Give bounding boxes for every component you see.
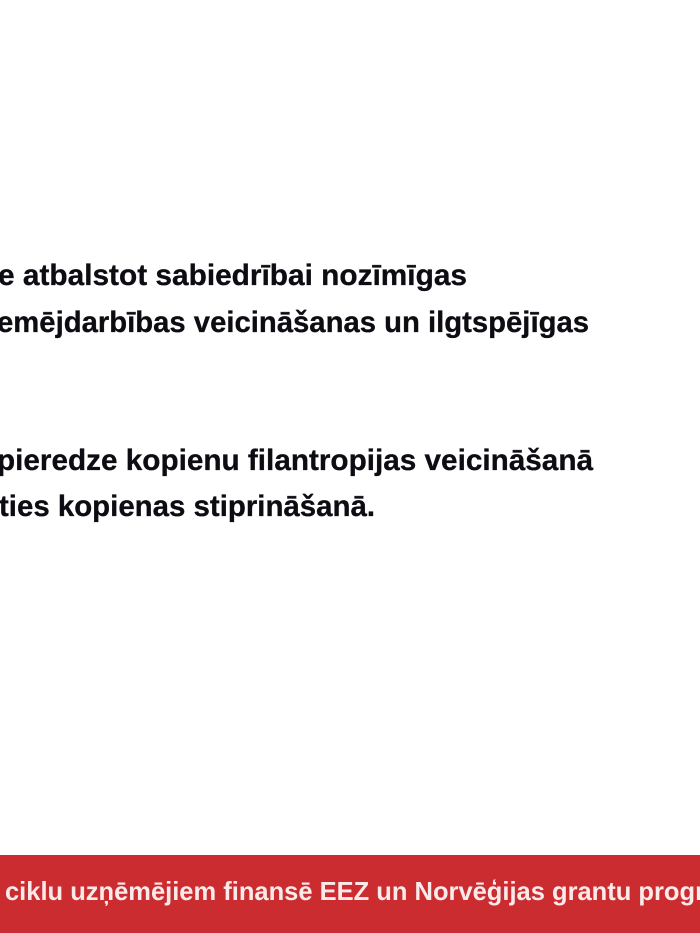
text block: second paragraph	[0, 444, 593, 523]
text block: second paragraph: ties kopienas stiprināšanā.	[0, 490, 375, 523]
footer text: ciklu uzņēmējiem finansē EEZ un Norvēģijas grantu progr	[5, 876, 700, 906]
text block: second paragraph: pieredze kopienu filantropijas veicināšanā	[0, 444, 593, 477]
text block: first paragraph: e atbalstot sabiedrībai nozīmīgas	[0, 259, 467, 292]
footer banner	[0, 855, 700, 933]
text block: first paragraph: emējdarbības veicināšanas un ilgtspējīgas	[0, 306, 589, 339]
text block: first paragraph	[0, 259, 589, 339]
